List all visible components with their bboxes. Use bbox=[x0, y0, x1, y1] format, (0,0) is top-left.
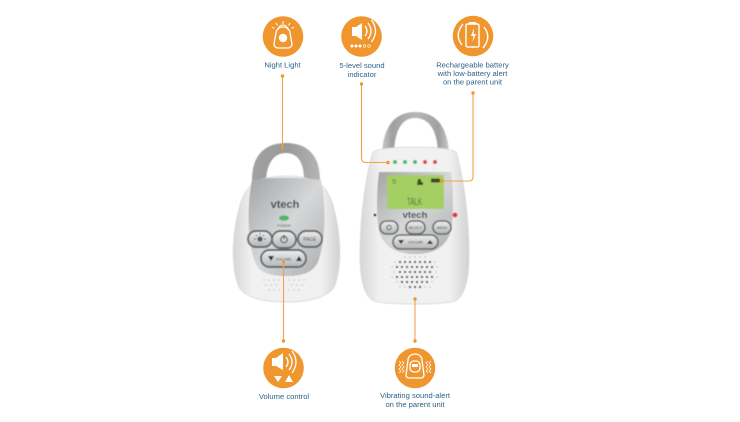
label: battery: with low-battery alert bbox=[437, 69, 508, 78]
menu button bbox=[433, 221, 451, 234]
speaker dots bbox=[263, 279, 305, 291]
leader line: sound indicator bbox=[360, 82, 390, 164]
logo: vtech bbox=[271, 199, 300, 211]
icon: battery bbox=[453, 16, 493, 56]
LCD screen: Ti bbox=[392, 180, 396, 186]
menu button: MENU bbox=[437, 226, 448, 230]
speaker grille bbox=[391, 256, 438, 288]
handle bbox=[252, 143, 320, 180]
night light button bbox=[248, 231, 272, 247]
volume button: VOLUME bbox=[275, 258, 292, 262]
label: battery: Rechargeable battery bbox=[436, 60, 509, 70]
silver panel bbox=[249, 178, 324, 276]
handle bbox=[382, 112, 449, 152]
leader line: battery bbox=[440, 91, 475, 183]
label: vibrating alert bbox=[380, 391, 451, 409]
leader line: volume bbox=[282, 260, 285, 343]
volume button bbox=[393, 235, 438, 249]
side indicators bbox=[374, 213, 457, 217]
icon: vibrating alert bbox=[395, 348, 435, 388]
body bbox=[360, 147, 469, 304]
select button: SELECT bbox=[409, 226, 423, 230]
label: battery bbox=[436, 60, 509, 86]
icon: volume control bbox=[263, 348, 304, 388]
volume button: VOLUME bbox=[408, 240, 424, 244]
label: vibrating alert: on the parent unit bbox=[385, 400, 445, 409]
leader line: night light bbox=[281, 74, 284, 150]
device: parent unit (right) bbox=[360, 112, 469, 304]
page button bbox=[298, 231, 322, 247]
label: sound indicator: indicator bbox=[348, 70, 377, 79]
body bbox=[233, 176, 340, 302]
logo: vtech bbox=[403, 210, 428, 221]
device: nursery unit (left) bbox=[233, 143, 340, 302]
label: volume control: Volume control bbox=[259, 392, 309, 401]
LCD screen: TALK bbox=[407, 197, 422, 208]
label: night light: Night Light bbox=[264, 60, 302, 70]
silver panel bbox=[377, 172, 453, 254]
power button bbox=[272, 231, 296, 248]
select button bbox=[406, 221, 425, 234]
power button bbox=[380, 221, 398, 234]
status lights bbox=[393, 160, 437, 164]
device: nursery unit (left): POWER bbox=[277, 224, 291, 228]
icon: night light bbox=[263, 16, 303, 57]
label: battery: on the parent unit bbox=[443, 78, 503, 86]
power light bbox=[279, 215, 289, 221]
label: sound indicator: 5-level sound bbox=[339, 61, 385, 70]
leader line: vibrating bbox=[413, 297, 417, 343]
icon: sound level bbox=[341, 16, 382, 57]
volume button bbox=[261, 250, 306, 267]
label: vibrating alert: Vibrating sound-alert bbox=[380, 391, 451, 400]
page button: PAGE bbox=[303, 237, 317, 243]
LCD screen bbox=[387, 175, 444, 209]
label: sound indicator bbox=[339, 61, 385, 79]
